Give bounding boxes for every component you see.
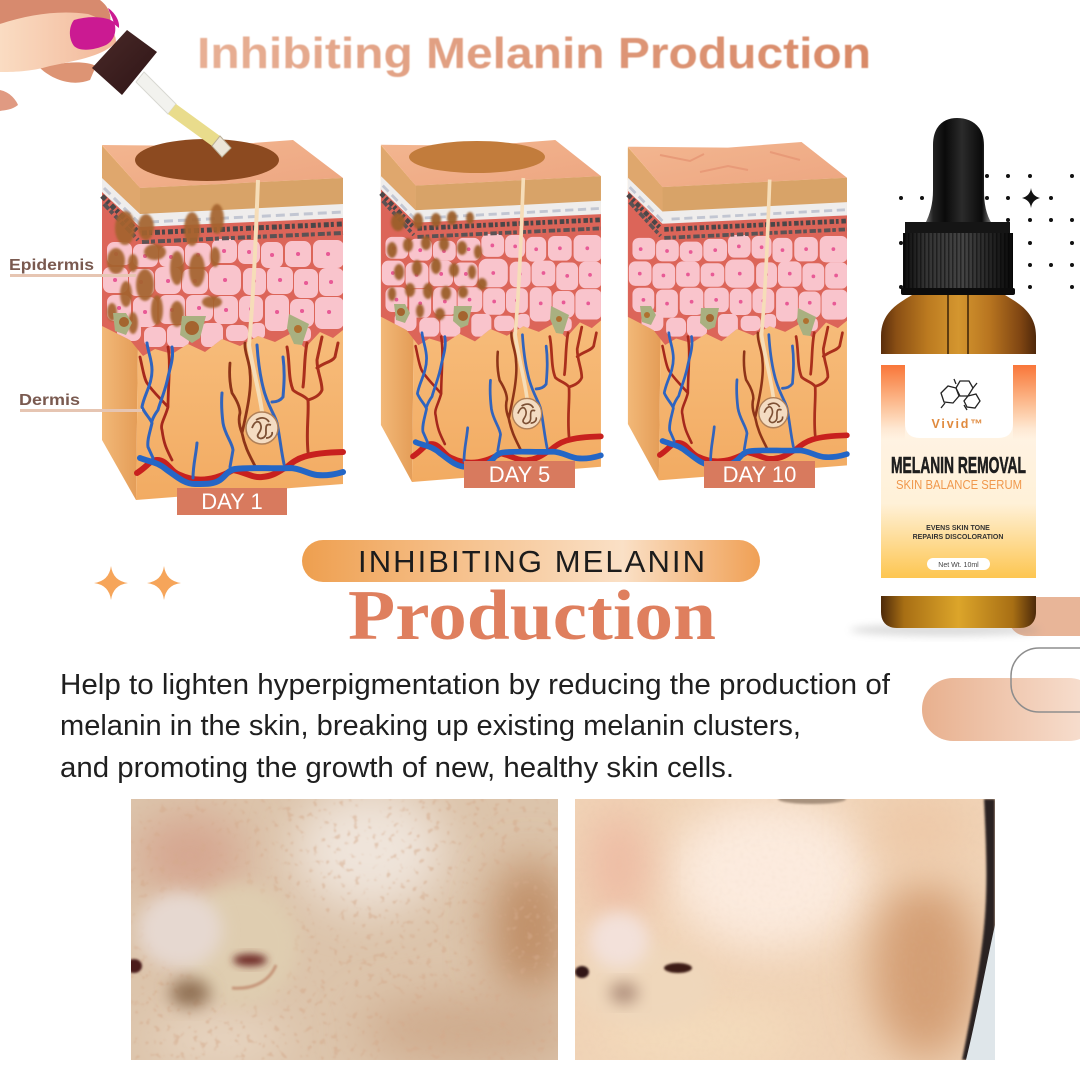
photo: after, clear skin [575,794,995,1065]
melanin clusters [387,211,487,320]
inner dropper tube [948,295,968,355]
heading: Production: Production [348,577,716,655]
fading spot on skin surface [409,141,545,173]
ribbed cap [903,233,1013,288]
title: Inhibiting Melanin Production [197,29,871,78]
decorative dots and star [899,174,1074,289]
body text: and promoting the growth of new, healthy skin cells. [60,752,734,784]
decorative pills [922,597,1080,741]
melanin clusters [107,204,224,334]
orange label [881,365,1036,578]
icon: fingers [0,0,116,111]
panel: skin block day 10 [628,142,847,480]
subtitle pill [302,540,760,582]
subtitle pill: INHIBITING MELANIN [358,544,705,579]
body text [60,669,891,784]
product subtitle: SKIN BALANCE SERUM [896,477,1022,492]
healed skin surface marks [660,152,800,172]
badge: day 5 [464,461,575,488]
body text: melanin in the skin, breaking up existing melanin clusters, [60,710,801,742]
panel: skin block day 1 [102,139,343,500]
body text: Help to lighten hyperpigmentation by reducing the production of [60,669,891,701]
product claims: REPAIRS DISCOLORATION [913,534,1003,541]
pigmented green cells [640,306,816,336]
amber glass shoulder [881,295,1036,358]
pigmented green cells [394,304,569,334]
panel: skin block day 5 [381,140,601,482]
badge: day 1 [177,488,287,515]
sparkles [94,566,181,600]
brand name: Vivid™ [932,417,984,431]
label: dermis [19,392,142,412]
dropper bulb [925,118,992,224]
badge: day 10: DAY 10 [723,462,796,487]
white label band [881,354,1036,596]
molecule logo [941,379,980,410]
icon: dropper cap [92,30,157,95]
photo: before, freckled skin [131,799,558,1060]
net weight [927,558,990,570]
cap lip [901,288,1015,295]
badge: day 1: DAY 1 [201,489,263,514]
logo plate [905,354,1013,438]
net weight: Net Wt. 10ml [938,562,979,569]
amber glass base [881,596,1036,628]
dropper collar [905,222,1010,234]
product claims [913,525,1003,541]
label: epidermis [9,257,136,277]
label: dermis: Dermis [19,392,80,409]
badge: day 10 [704,461,815,488]
brown spot on skin surface [135,139,279,181]
hand holding dropper [0,0,231,157]
icon: glass dropper tube [136,72,231,157]
icon: magenta nails [70,8,119,50]
badge: day 5: DAY 5 [489,462,550,487]
product bottle [850,118,1040,636]
pigmented green cells [113,313,309,345]
bottle shadow [850,624,1040,636]
label: epidermis: Epidermis [9,257,94,274]
product claims: EVENS SKIN TONE [926,525,990,532]
